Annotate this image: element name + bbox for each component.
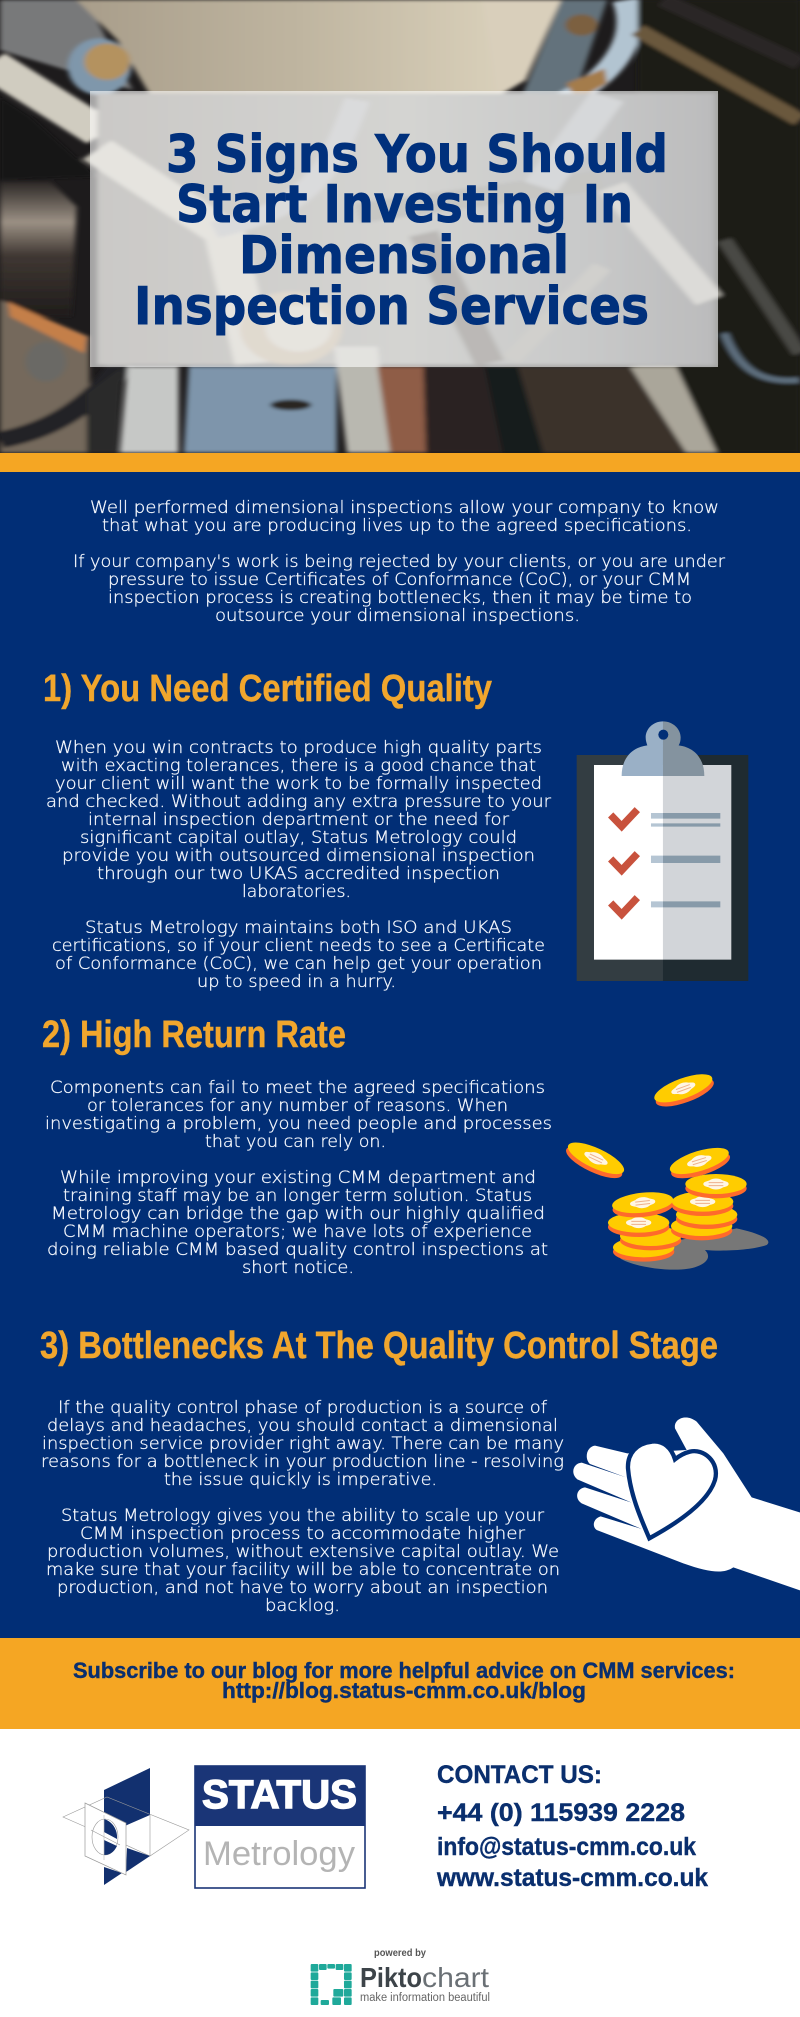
title: Inspection Services [134,277,649,337]
powered by Piktochart badge: chart [422,1962,489,1993]
contact details: info@status-cmm.co.uk [437,1833,696,1861]
contact details: CONTACT US: [437,1761,602,1789]
text: section 1: up to speed in a hurry. [197,972,396,992]
text: section 3: delays and headaches, you should contact a dimensional [47,1416,558,1436]
text: section 3: reasons for a bottleneck in your production line - resolving [41,1452,564,1472]
text: section 1: of Conformance (CoC), we can help get your operation [55,954,542,974]
text: section 1: through our two UKAS accredited inspection [97,864,500,884]
title panel [90,91,718,367]
text: section 2: training staff may be an longer term solution. Status [63,1186,532,1206]
text: section 3: the issue quickly is imperative. [164,1470,437,1490]
text: section 3 [41,1398,564,1616]
intro text: Well performed dimensional inspections allow your company to know [90,498,719,518]
title: 3 Signs You Should [166,125,668,185]
heading: section 2: 2) High Return Rate [42,1014,346,1056]
title: Dimensional [239,226,569,286]
text: section 2: Metrology can bridge the gap with our highly qualified [51,1204,545,1224]
contact details [436,1761,708,1892]
text: section 3: backlog. [265,1596,340,1616]
icon: hand holding heart [573,1417,800,1591]
icon: clipboard checklist [577,721,748,981]
logo mark: Status Metrology [63,1768,189,1885]
text: section 1: certifications, so if your client needs to see a Certificate [52,936,545,956]
panel: subscribe banner [0,1638,800,1729]
icon: Piktochart grid [311,1964,352,2005]
intro text: outsource your dimensional inspections. [215,606,580,626]
powered by Piktochart badge: Pikto [360,1962,422,1993]
text: section 2: Components can fail to meet the agreed specifications [50,1078,545,1098]
orange divider band [0,453,800,472]
text: section 3: If the quality control phase of production is a source of [58,1398,547,1418]
text: section 2: short notice. [242,1258,354,1278]
text: section 3: make sure that your facility will be able to concentrate on [46,1560,560,1580]
heading: section 1: 1) You Need Certified Quality [43,668,492,710]
text: section 2: that you can rely on. [205,1132,386,1152]
title [134,125,668,337]
text: section 3: inspection service provider right away. There can be many [42,1434,564,1454]
intro text: inspection process is creating bottlenecks, then it may be time to [108,588,692,608]
powered by Piktochart badge: powered by [374,1947,426,1959]
text: section 2: or tolerances for any number of reasons. When [87,1096,508,1116]
text: section 1: significant capital outlay, Status Metrology could [80,828,517,848]
intro text [73,498,725,626]
text: section 1: laboratories. [242,882,351,902]
contact details: www.status-cmm.co.uk [436,1864,708,1892]
subscribe text: http://blog.status-cmm.co.uk/blog [222,1678,586,1703]
hero photo: engine detail [0,0,800,453]
logo wordmark: STATUS Metrology: Metrology [203,1835,355,1873]
powered by Piktochart badge: make information beautiful [360,1992,490,2004]
intro text: pressure to issue Certificates of Conformance (CoC), or your CMM [108,570,691,590]
underlay beneath the translucent title box [97,93,714,365]
text: section 3: production, and not have to worry about an inspection [57,1578,548,1598]
powered by Piktochart badge [311,1947,490,2005]
icon: gold coins [562,1068,768,1270]
text: section 1: When you win contracts to produce high quality parts [55,738,542,758]
text: section 2 [45,1078,552,1278]
text: section 3: Status Metrology gives you the ability to scale up your [61,1506,544,1526]
text: section 3: production volumes, without extensive capital outlay. We [47,1542,559,1562]
text: section 2: While improving your existing CMM department and [60,1168,536,1188]
text: section 2: CMM machine operators; we have lots of experience [63,1222,532,1242]
intro text: If your company's work is being rejected by your clients, or you are under [73,552,725,572]
logo wordmark: STATUS Metrology: STATUS [202,1773,357,1817]
contact details: +44 (0) 115939 2228 [437,1799,685,1827]
subscribe text: Subscribe to our blog for more helpful advice on CMM services: [73,1658,735,1683]
text: section 1: your client will want the work to be formally inspected [55,774,542,794]
text: section 1 [46,738,551,992]
logo wordmark: STATUS Metrology [195,1766,365,1888]
text: section 1: and checked. Without adding any extra pressure to your [46,792,551,812]
subscribe text [73,1658,735,1703]
text: section 2: doing reliable CMM based quality control inspections at [47,1240,548,1260]
title: Start Investing In [176,175,633,235]
text: section 3: CMM inspection process to accommodate higher [80,1524,525,1544]
text: section 1: with exacting tolerances, there is a good chance that [61,756,536,776]
text: section 2: investigating a problem, you need people and processes [45,1114,552,1134]
text: section 1: internal inspection department or the need for [88,810,509,830]
text: section 1: provide you with outsourced dimensional inspection [62,846,535,866]
text: section 1: Status Metrology maintains both ISO and UKAS [85,918,512,938]
panel: navy content background [0,472,800,1638]
intro text: that what you are producing lives up to the agreed specifications. [102,516,692,536]
